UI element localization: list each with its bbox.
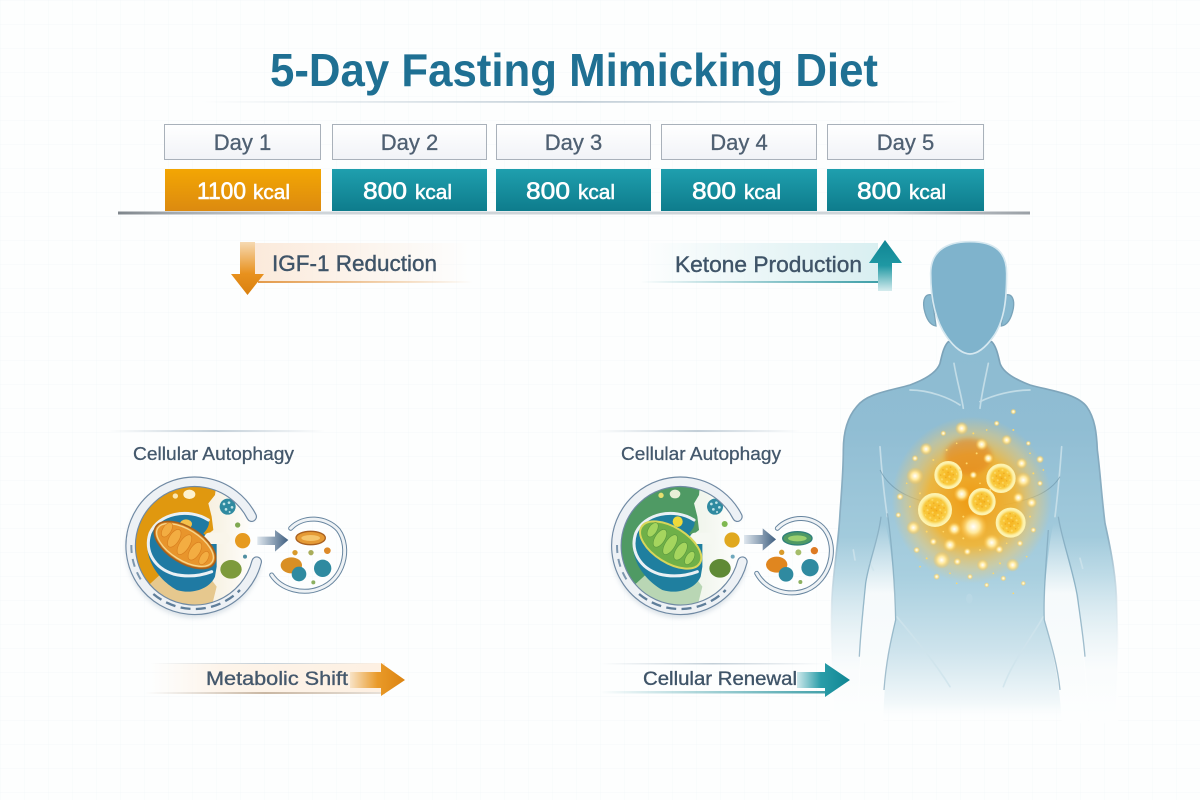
callout: ketone production: Ketone Production <box>675 252 862 277</box>
tan lower cytoplasm <box>150 566 217 604</box>
icon: green autophagy cell <box>606 477 831 613</box>
callout: IGF-1 reduction <box>231 242 473 295</box>
soft shadow <box>131 485 257 613</box>
blue sac <box>633 513 702 592</box>
day 1 calories <box>165 169 321 211</box>
day 3 calories <box>496 169 651 211</box>
day 1 calories: kcal <box>253 182 290 204</box>
callout: ketone production <box>640 240 902 291</box>
day 2 calories: 800 <box>363 178 407 205</box>
day 3 header: Day 3 <box>545 130 602 155</box>
outer membrane <box>131 482 257 610</box>
cell interior <box>616 482 742 610</box>
arm fade right <box>1063 537 1118 723</box>
icon: right arrow <box>797 663 850 697</box>
day 3 calories: kcal <box>578 182 615 204</box>
cream notch <box>204 533 230 544</box>
organelles <box>707 499 723 515</box>
day 5 calories: 800 <box>857 178 901 205</box>
heading: cellular autophagy left: Cellular Autophagy <box>133 443 295 464</box>
day 2 calories <box>332 169 487 211</box>
day 4 header: Day 4 <box>710 130 768 155</box>
pale notch <box>690 533 716 544</box>
ears <box>924 295 1014 326</box>
mitochondrion <box>147 512 223 578</box>
chest contour <box>880 470 1060 505</box>
day 1 calories: 1100 <box>197 178 246 205</box>
day 5 header: Day 5 <box>877 130 934 155</box>
human body illustration <box>830 242 1118 723</box>
callout: cellular renewal: Cellular Renewal <box>643 669 797 690</box>
callout: metabolic shift <box>145 663 405 696</box>
sac highlight <box>634 513 697 576</box>
day 4 calories: kcal <box>744 182 781 204</box>
title: 5-Day Fasting Mimicking Diet <box>270 44 878 96</box>
icon: orange autophagy cell <box>120 477 345 613</box>
day 2 calories: kcal <box>415 182 452 204</box>
membrane dashes <box>639 590 726 609</box>
blue sac <box>147 513 217 592</box>
mitochondrion <box>632 512 709 578</box>
day 1 header <box>164 124 320 160</box>
small vesicle <box>757 519 831 593</box>
arm fade left <box>830 537 877 723</box>
heading rule left <box>108 430 325 432</box>
day 3 header <box>496 124 650 160</box>
torso and arm edge lines <box>859 513 1085 690</box>
gap between left arm and torso <box>857 507 895 723</box>
small vesicle <box>272 519 345 591</box>
head <box>931 242 1007 354</box>
body silhouette <box>831 342 1117 723</box>
sparkles <box>895 409 1044 588</box>
day 5 header <box>828 124 984 160</box>
icon: right arrow <box>350 663 405 696</box>
day 2 header <box>332 124 486 160</box>
day 1 header: Day 1 <box>214 130 271 155</box>
baseline <box>118 212 1030 214</box>
membrane dashes <box>153 590 240 609</box>
callout: cellular renewal <box>600 663 850 697</box>
gap between right arm and torso <box>1044 507 1089 723</box>
transfer arrow <box>744 528 776 551</box>
day 5 calories: kcal <box>909 182 946 204</box>
icon: down arrow <box>231 242 264 295</box>
day 5 calories <box>827 169 984 211</box>
icon: up arrow <box>869 240 902 291</box>
outer membrane <box>616 482 742 610</box>
pale lower cytoplasm <box>636 566 702 604</box>
heading rule right <box>595 430 800 432</box>
transfer arrow <box>257 530 288 552</box>
callout: metabolic shift: Metabolic Shift <box>206 669 349 690</box>
day 4 header <box>662 124 816 160</box>
heading: cellular autophagy right: Cellular Autophagy <box>621 443 782 464</box>
navel <box>966 594 973 604</box>
organelles <box>220 499 236 515</box>
day 3 calories: 800 <box>526 178 570 205</box>
day 4 calories <box>661 169 817 211</box>
callout: IGF-1 reduction: IGF-1 Reduction <box>272 251 437 276</box>
cell interior <box>131 482 257 610</box>
sac highlight <box>148 513 212 576</box>
fine dust <box>906 429 1044 594</box>
day 2 header: Day 2 <box>381 130 438 155</box>
glowing cells <box>919 462 1025 537</box>
cell texture <box>924 466 1021 533</box>
orange cytoplasm <box>136 487 216 584</box>
green cytoplasm <box>622 487 700 584</box>
energy glow <box>892 409 1052 594</box>
day schedule table <box>118 124 1030 214</box>
soft shadow <box>616 485 742 613</box>
muscle contour lines <box>853 363 1083 687</box>
day 4 calories: 800 <box>692 178 736 205</box>
